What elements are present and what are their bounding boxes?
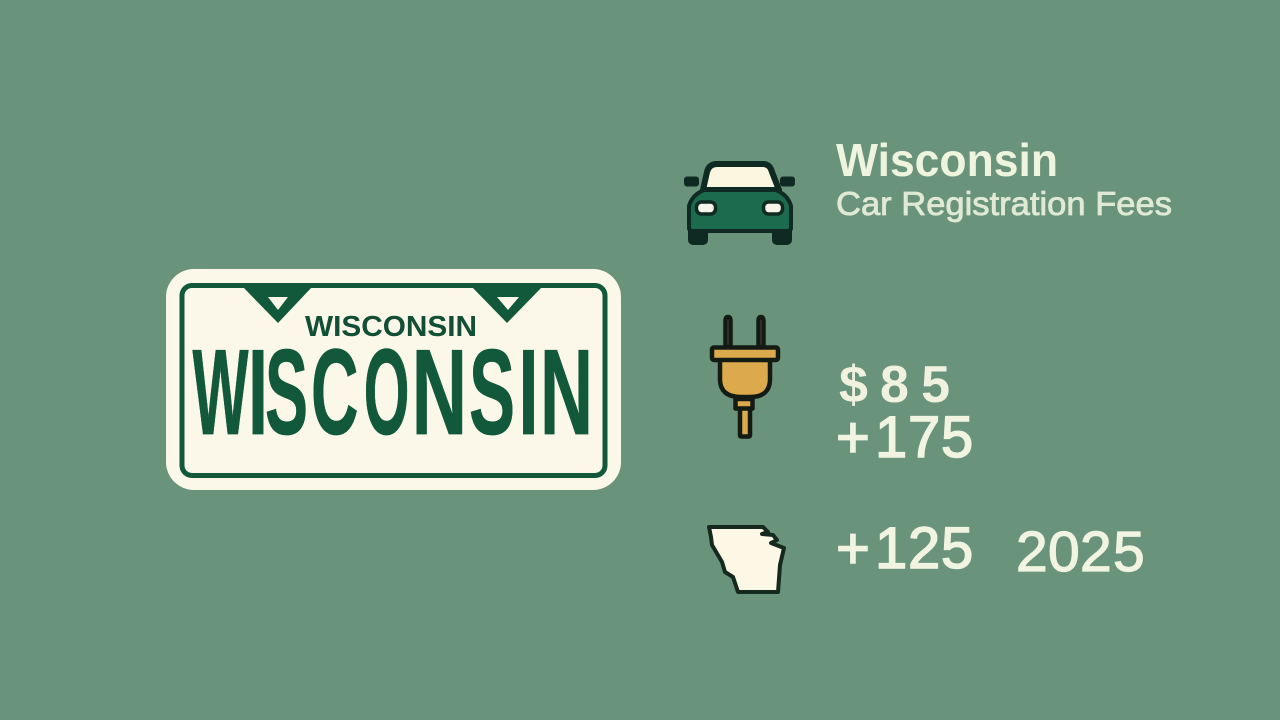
car roof and windshield (703, 164, 779, 190)
plug prongs (726, 317, 764, 347)
subheading: Car Registration Fees: Car Registration Fees (836, 185, 1172, 222)
plate large state name: W (192, 324, 249, 460)
icon: Wisconsin state shape (709, 527, 784, 592)
plug neck (736, 399, 752, 408)
fee: +175: +175 (836, 405, 973, 470)
fee: +125: +125 (836, 516, 973, 581)
icon: right mounting notch (472, 287, 542, 323)
panel: license plate (166, 269, 621, 490)
plate background (166, 269, 621, 490)
plate large state name: I (518, 324, 538, 460)
plug body (720, 358, 770, 397)
plug flange (712, 348, 778, 360)
plate large state name: I (248, 324, 268, 460)
plate large state name: S (265, 324, 308, 460)
plate large state name: N (412, 324, 467, 460)
plug stem (740, 408, 750, 436)
heading: Wisconsin: Wisconsin (836, 134, 1058, 186)
plate large state name: N (540, 324, 593, 460)
plate large state name: O (364, 324, 409, 460)
icon: left mounting notch (243, 287, 312, 323)
plate border (182, 286, 605, 476)
plate large state name: C (311, 324, 358, 460)
icon: car (684, 164, 795, 245)
car body (689, 190, 791, 231)
car mirrors (684, 176, 795, 186)
plate large state name (192, 324, 593, 460)
year: 2025: 2025 (1016, 520, 1145, 584)
plate small state name: WISCONSIN (305, 311, 477, 343)
icon: plug (712, 317, 778, 436)
fee: $85: $85 (839, 356, 950, 414)
car right headlight (764, 202, 782, 214)
plate large state name: S (469, 324, 515, 460)
car left headlight (696, 202, 716, 214)
car wheels (688, 226, 792, 245)
